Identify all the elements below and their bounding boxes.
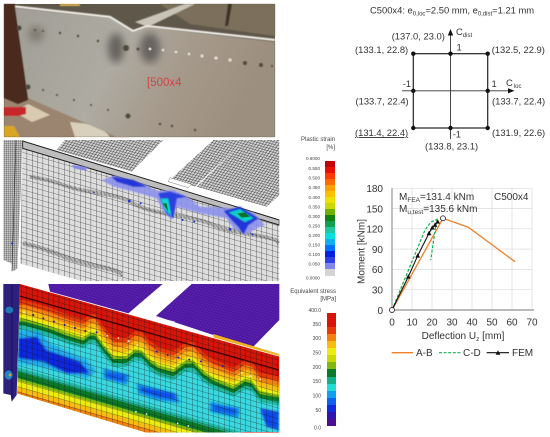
point values: (131.4, 22.4) (355, 127, 408, 138)
top flange band (23, 141, 279, 225)
annotation: moments: FEA (407, 197, 421, 204)
y tick labels: 180 (366, 184, 383, 195)
tick labels: 200 (313, 365, 321, 371)
column (4, 4, 28, 104)
annotation: section: C500x4 (494, 192, 529, 203)
colour bar (327, 313, 336, 426)
buckle shading (28, 26, 160, 63)
axis ticks (403, 42, 497, 140)
diagram title: C500x4: e (370, 4, 413, 16)
x tick labels: 40 (466, 318, 478, 328)
axis ticks: -1 (453, 128, 461, 140)
x tick labels: 30 (446, 318, 458, 328)
colour bar (325, 161, 335, 276)
bolt holes (16, 26, 273, 131)
annotation: moments: M (399, 192, 407, 203)
y tick labels: 90 (372, 245, 383, 256)
point values: (133.7, 22.4) (492, 96, 545, 106)
annotation: moments: u,test (407, 209, 423, 216)
top flange highlight (15, 6, 275, 40)
diagram title: 0,loc (413, 12, 425, 18)
plastic strain contours (11, 165, 265, 244)
tick labels: 0.0 (314, 426, 321, 432)
x axis title: z (476, 336, 479, 343)
grid (392, 188, 532, 310)
axis ticks: 1 (492, 78, 497, 89)
y tick labels: 120 (366, 225, 383, 236)
axes (392, 188, 534, 310)
axis label: C dist: C (456, 26, 463, 37)
flange line (20, 296, 279, 370)
y tick labels: 60 (372, 265, 383, 276)
x tick labels (389, 318, 538, 328)
panel: test specimen photo (4, 4, 275, 137)
tick labels: 0.400 (308, 195, 320, 200)
series: C-D (392, 220, 437, 310)
axis label: C loc: C (506, 77, 513, 88)
axis label: C dist: dist (463, 33, 472, 39)
tick labels: 150 (313, 379, 321, 385)
point values: (137.0, 23.0) (392, 30, 445, 42)
purple plates (48, 284, 279, 356)
legend: C-D (463, 348, 481, 359)
legend: A-B (416, 348, 433, 359)
fine mesh around bolt rows (23, 177, 278, 275)
series: A-B (392, 218, 515, 310)
tick labels: 400.0 (308, 308, 321, 314)
tick labels: 0.0000 (306, 276, 320, 280)
annotation: moments: =131.4 kNm (420, 192, 474, 203)
tick labels: 50 (315, 408, 321, 414)
beam web (15, 8, 275, 137)
x tick labels: 0 (389, 318, 395, 328)
legend title: [MPa] (320, 296, 336, 302)
y tick labels: 0 (377, 306, 383, 317)
mesh (13, 284, 280, 433)
x tick labels: 60 (506, 318, 518, 328)
column (3, 284, 20, 402)
panel: plastic strain mesh (3, 140, 279, 281)
chart: moment vs deflection (356, 184, 538, 359)
background structure behind the beam (60, 4, 275, 36)
axis ticks: 1 (456, 42, 462, 52)
tick labels: 0.300 (308, 214, 320, 219)
legend title: Plastic strain (301, 137, 335, 143)
y tick labels: 150 (366, 204, 383, 215)
tick labels: 0.6000 (306, 156, 320, 161)
parameter square (402, 34, 510, 139)
y tick labels: 30 (372, 286, 383, 296)
panel: equivalent stress contour (3, 284, 280, 433)
x tick labels: 20 (426, 318, 438, 328)
legend: plastic strain (301, 137, 335, 280)
legend: equivalent stress (290, 289, 336, 432)
y tick labels (366, 184, 383, 317)
tick labels: 300 (313, 336, 321, 342)
annotation: moments: =135.6 kNm (423, 204, 477, 215)
floor (4, 98, 130, 137)
left column (3, 140, 23, 272)
blue stress regions (18, 330, 278, 430)
legend title: [%] (326, 145, 335, 151)
web contour bands (13, 284, 280, 433)
arrow: C loc axis (508, 88, 514, 93)
axis label: C loc: loc (514, 84, 521, 90)
legend: FEM (512, 348, 533, 359)
tick labels: 0.450 (308, 185, 320, 190)
tick labels: 0.250 (308, 224, 320, 228)
bolt holes (32, 314, 224, 367)
tick labels: 0.150 (308, 242, 320, 248)
panel: imperfection diagram (355, 4, 545, 152)
tick labels: 350 (313, 322, 321, 328)
plates above web (57, 140, 279, 207)
tick labels: 100 (313, 394, 321, 400)
x tick labels: 10 (406, 318, 418, 328)
axis ticks: -1 (403, 78, 411, 89)
annotation: moments: M (399, 204, 407, 215)
tick labels: 0.350 (308, 204, 320, 210)
tick labels: 0.500 (308, 176, 320, 180)
x tick labels: 70 (526, 318, 538, 328)
point values (355, 30, 545, 152)
point values: (132.5, 22.9) (492, 44, 545, 55)
annotation: moments (399, 192, 477, 216)
x tick labels: 50 (486, 318, 498, 328)
diagram title: =2.50 mm, e (425, 4, 478, 16)
tick labels: 0.200 (308, 233, 320, 238)
x axis title: [mm] (479, 331, 505, 342)
arrow: C dist axis (448, 29, 453, 36)
tick labels: 0.050 (308, 262, 320, 266)
legend title: Equivalent stress (290, 289, 336, 295)
point values: (131.9, 22.6) (492, 127, 545, 138)
tick labels: 250 (313, 350, 321, 356)
diagram title: 0,dist (478, 12, 492, 18)
web (20, 145, 279, 281)
x axis title: Deflection U (422, 331, 476, 342)
specimen marking: [500x4 (147, 77, 182, 89)
point values: (133.1, 22.8) (355, 44, 408, 55)
y axis title: Moment [kNm] (356, 219, 368, 284)
tick labels: 0.100 (308, 252, 320, 257)
markers: open circles (390, 216, 446, 312)
point values: (133.7, 22.4) (356, 96, 409, 106)
legend (392, 348, 533, 359)
diagram title: =1.21 mm (492, 4, 534, 16)
point values: (133.8, 23.1) (425, 140, 478, 152)
series: FEM (392, 219, 440, 310)
tick labels: 0.550 (308, 166, 320, 171)
